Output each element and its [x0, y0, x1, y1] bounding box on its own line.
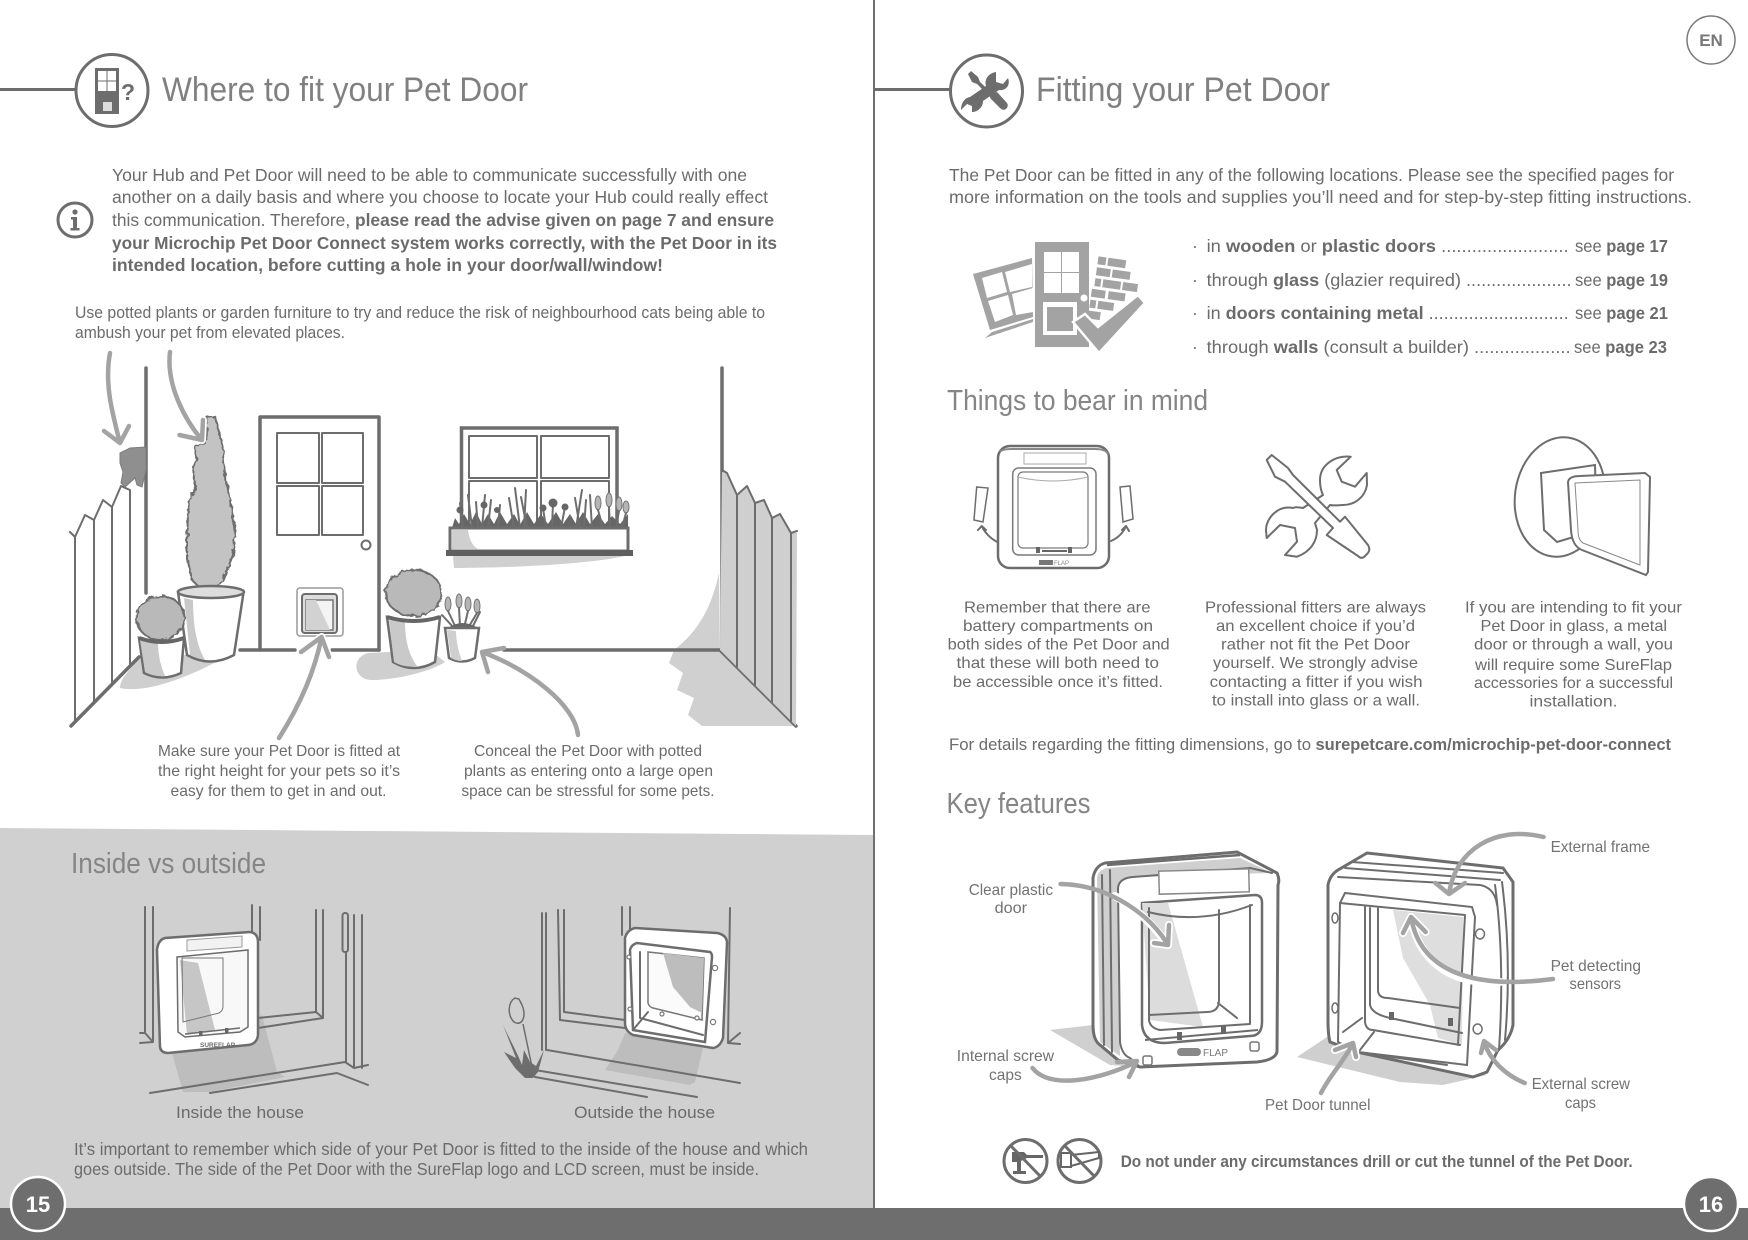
large right plant in pot [386, 570, 442, 616]
caption: glass, metal or wall: accessories for a successful [1474, 675, 1673, 692]
text block: communication advice: Your Hub and Pet Door will need to be able to communicate successfully with one [112, 165, 747, 185]
bottom band [0, 1208, 1748, 1240]
text block: which side [74, 1139, 808, 1179]
pet door in door [297, 588, 343, 636]
caption: conceal pet door: plants as entering onto a large open [464, 763, 713, 780]
caption: battery compartments: that these will both need to [956, 655, 1159, 672]
page divider [873, 0, 875, 1208]
text: fitting dimensions link [949, 736, 1671, 754]
label: outside the house: Outside the house [574, 1104, 715, 1122]
caption: battery compartments: Remember that there are [964, 600, 1151, 616]
label and arrow: external frame [1435, 834, 1650, 894]
arrow: tree [169, 352, 203, 440]
caption: professional fitters: contacting a fitter if you wish [1210, 674, 1423, 691]
label and arrow: pet door tunnel: Pet Door tunnel [1265, 1097, 1370, 1114]
caption: battery compartments: battery compartments on [963, 618, 1153, 635]
page number 16: 16 [1699, 1192, 1723, 1217]
caption: professional fitters: to install into glass or a wall. [1212, 692, 1420, 710]
list row: glass: see page 19 [1575, 270, 1668, 290]
language badge EN [1687, 16, 1735, 64]
label and arrow: external screw caps: External screw [1532, 1076, 1630, 1093]
caption: professional fitters: yourself. We strongly advise [1213, 655, 1418, 672]
heading: inside vs outside: Inside vs outside [71, 848, 266, 880]
caption: pet door height: Make sure your Pet Door is fitted at [158, 743, 401, 760]
text block: communication advice: another on a daily basis and where you choose to locate your Hub could really effect [112, 187, 768, 207]
illustration: garden scene [70, 352, 797, 738]
illustration: pet door front [1050, 852, 1279, 1067]
walls and floor [71, 368, 796, 726]
list row: metal: see page 21 [1575, 303, 1668, 323]
text block: locations intro [949, 165, 1692, 207]
header icon: door with question mark: ? [121, 79, 135, 105]
list row: wooden or plastic: see page 17 [1575, 236, 1668, 256]
text block: communication advice: this communication. Therefore, please read the advise given on page 7 and ensure [112, 210, 774, 230]
caption: glass, metal or wall: installation. [1530, 694, 1618, 710]
text: fitting dimensions link: For details regarding the fitting dimensions, go to [949, 736, 1311, 754]
illustration: outside the house [503, 907, 740, 1097]
list row: glass: · [1192, 270, 1198, 290]
language badge EN: EN [1699, 31, 1723, 50]
caption: glass, metal or wall: door or through a wall, you [1474, 636, 1673, 654]
tulip [503, 998, 544, 1078]
label and arrow: pet door tunnel [1265, 1043, 1370, 1114]
door [260, 417, 379, 650]
label and arrow: pet detecting sensors [1403, 917, 1641, 993]
text block: potted plants advice: Use potted plants or garden furniture to try and reduce the risk of neighbourhood cats being able to [75, 304, 765, 322]
list row: wooden or plastic: in wooden or plastic doors ......................... [1207, 236, 1569, 256]
page number 15: 15 [26, 1192, 50, 1217]
caption: battery compartments: both sides of the Pet Door and [948, 636, 1170, 654]
arrow: pet door height [279, 637, 329, 738]
heading: key features: Key features [946, 788, 1090, 820]
text block: locations intro: The Pet Door can be fitted in any of the following locations. Please see the specified pages for [949, 165, 1674, 185]
text block: communication advice: your Microchip Pet Door Connect system works correctly, with the Pet Door in its [112, 233, 777, 253]
caption: conceal pet door: Conceal the Pet Door with potted [474, 743, 702, 760]
text: fitting dimensions link: surepetcare.com/microchip-pet-door-connect [1316, 736, 1671, 754]
icon: pet door with batteries [974, 446, 1133, 568]
header icon: door with question mark [0, 54, 148, 126]
caption: professional fitters: Professional fitters are always [1205, 600, 1426, 616]
caption: conceal pet door: space can be stressful for some pets. [462, 783, 714, 800]
text block: locations intro: more information on the tools and supplies you’ll need and for step-by-step fitting instructions. [949, 187, 1692, 207]
cat [120, 447, 146, 487]
caption: glass, metal or wall [1465, 600, 1683, 710]
icon: no cutting [1058, 1140, 1101, 1182]
panel: inside vs outside background [0, 828, 873, 1208]
caption: professional fitters: rather not fit the Pet Door [1221, 636, 1411, 654]
caption: professional fitters [1205, 600, 1426, 710]
label and arrow: clear plastic door [969, 882, 1169, 945]
text block: potted plants advice: ambush your pet from elevated places. [75, 324, 345, 342]
text block: which side: It’s important to remember which side of your Pet Door is fitted to the inside of the house and which [74, 1139, 808, 1159]
text block: communication advice [112, 165, 777, 275]
caption: pet door height: the right height for your pets so it’s [158, 763, 400, 780]
page number 16 [1684, 1177, 1738, 1231]
list row: metal: · [1192, 303, 1198, 323]
label and arrow: clear plastic door: Clear plastic [969, 882, 1053, 899]
caption: professional fitters: an excellent choice if you’d [1216, 618, 1415, 635]
label and arrow: clear plastic door: door [995, 900, 1028, 917]
caption: glass, metal or wall: If you are intending to fit your [1465, 600, 1683, 616]
warning text: Do not under any circumstances drill or cut the tunnel of the Pet Door. [1121, 1153, 1633, 1171]
list row: walls: through walls (consult a builder) ................... [1207, 337, 1571, 357]
title: fitting: Fitting your Pet Door [1036, 71, 1330, 109]
list row: walls: see page 23 [1574, 337, 1667, 357]
caption: battery compartments: be accessible once it’s fitted. [953, 674, 1163, 691]
tall topiary in pot [187, 417, 235, 589]
batteries [974, 486, 1133, 522]
header icon: tools [875, 55, 1022, 127]
label and arrow: internal screw caps: caps [989, 1067, 1022, 1084]
window [446, 428, 633, 568]
list row: walls: · [1192, 337, 1198, 357]
label and arrow: external screw caps [1481, 1041, 1630, 1112]
caption: glass, metal or wall: Pet Door in glass, a metal [1480, 618, 1667, 635]
shadows [120, 655, 216, 689]
label and arrow: internal screw caps [957, 1048, 1137, 1084]
icon: tunnel extension and glass [1507, 431, 1650, 575]
text block: communication advice: intended location, before cutting a hole in your door/wall/window! [112, 255, 663, 275]
label and arrow: pet detecting sensors: Pet detecting [1551, 958, 1641, 975]
right fence [720, 472, 797, 726]
left fence [70, 486, 130, 722]
label and arrow: internal screw caps: Internal screw [957, 1048, 1054, 1065]
icon: pet door with batteries: FLAP [1054, 561, 1069, 567]
label and arrow: external screw caps: caps [1565, 1095, 1596, 1112]
icon: info [58, 203, 92, 237]
window box plants [452, 512, 628, 528]
illustration: inside the house [140, 905, 368, 1093]
text block: potted plants advice [75, 304, 765, 342]
illustration: inside the house: SUREFLAP [200, 1042, 236, 1049]
page number 15 [11, 1177, 65, 1231]
icon: screwdriver and wrench [1266, 455, 1369, 558]
caption: pet door height [158, 743, 401, 800]
list: fitting locations [1192, 236, 1668, 357]
arrow: cat [104, 353, 129, 443]
label and arrow: pet detecting sensors: sensors [1570, 976, 1621, 993]
caption: conceal pet door [462, 743, 714, 800]
list row: metal: in doors containing metal ............................ [1207, 303, 1569, 323]
title: where to fit: Where to fit your Pet Door [162, 71, 528, 109]
text block: which side: goes outside. The side of the Pet Door with the SureFlap logo and LCD screen, must be inside. [74, 1159, 759, 1179]
icon: no drilling [1004, 1140, 1047, 1182]
icon: window, door, wall and tick [973, 242, 1145, 353]
caption: battery compartments [948, 600, 1170, 691]
illustration: pet door front: FLAP [1203, 1048, 1228, 1059]
heading: things to bear in mind: Things to bear in mind [947, 385, 1208, 417]
label and arrow: external frame: External frame [1551, 839, 1650, 856]
arrow: conceal [482, 648, 578, 735]
list row: wooden or plastic: · [1192, 236, 1198, 256]
caption: pet door height: easy for them to get in and out. [170, 783, 386, 800]
list row: glass: through glass (glazier required) ..................... [1207, 270, 1572, 290]
illustration: pet door back [1297, 853, 1513, 1085]
caption: glass, metal or wall: will require some SureFlap [1474, 657, 1672, 674]
label: inside the house: Inside the house [176, 1104, 304, 1122]
small left plant in pot [136, 596, 184, 640]
tulip pot [442, 594, 480, 662]
